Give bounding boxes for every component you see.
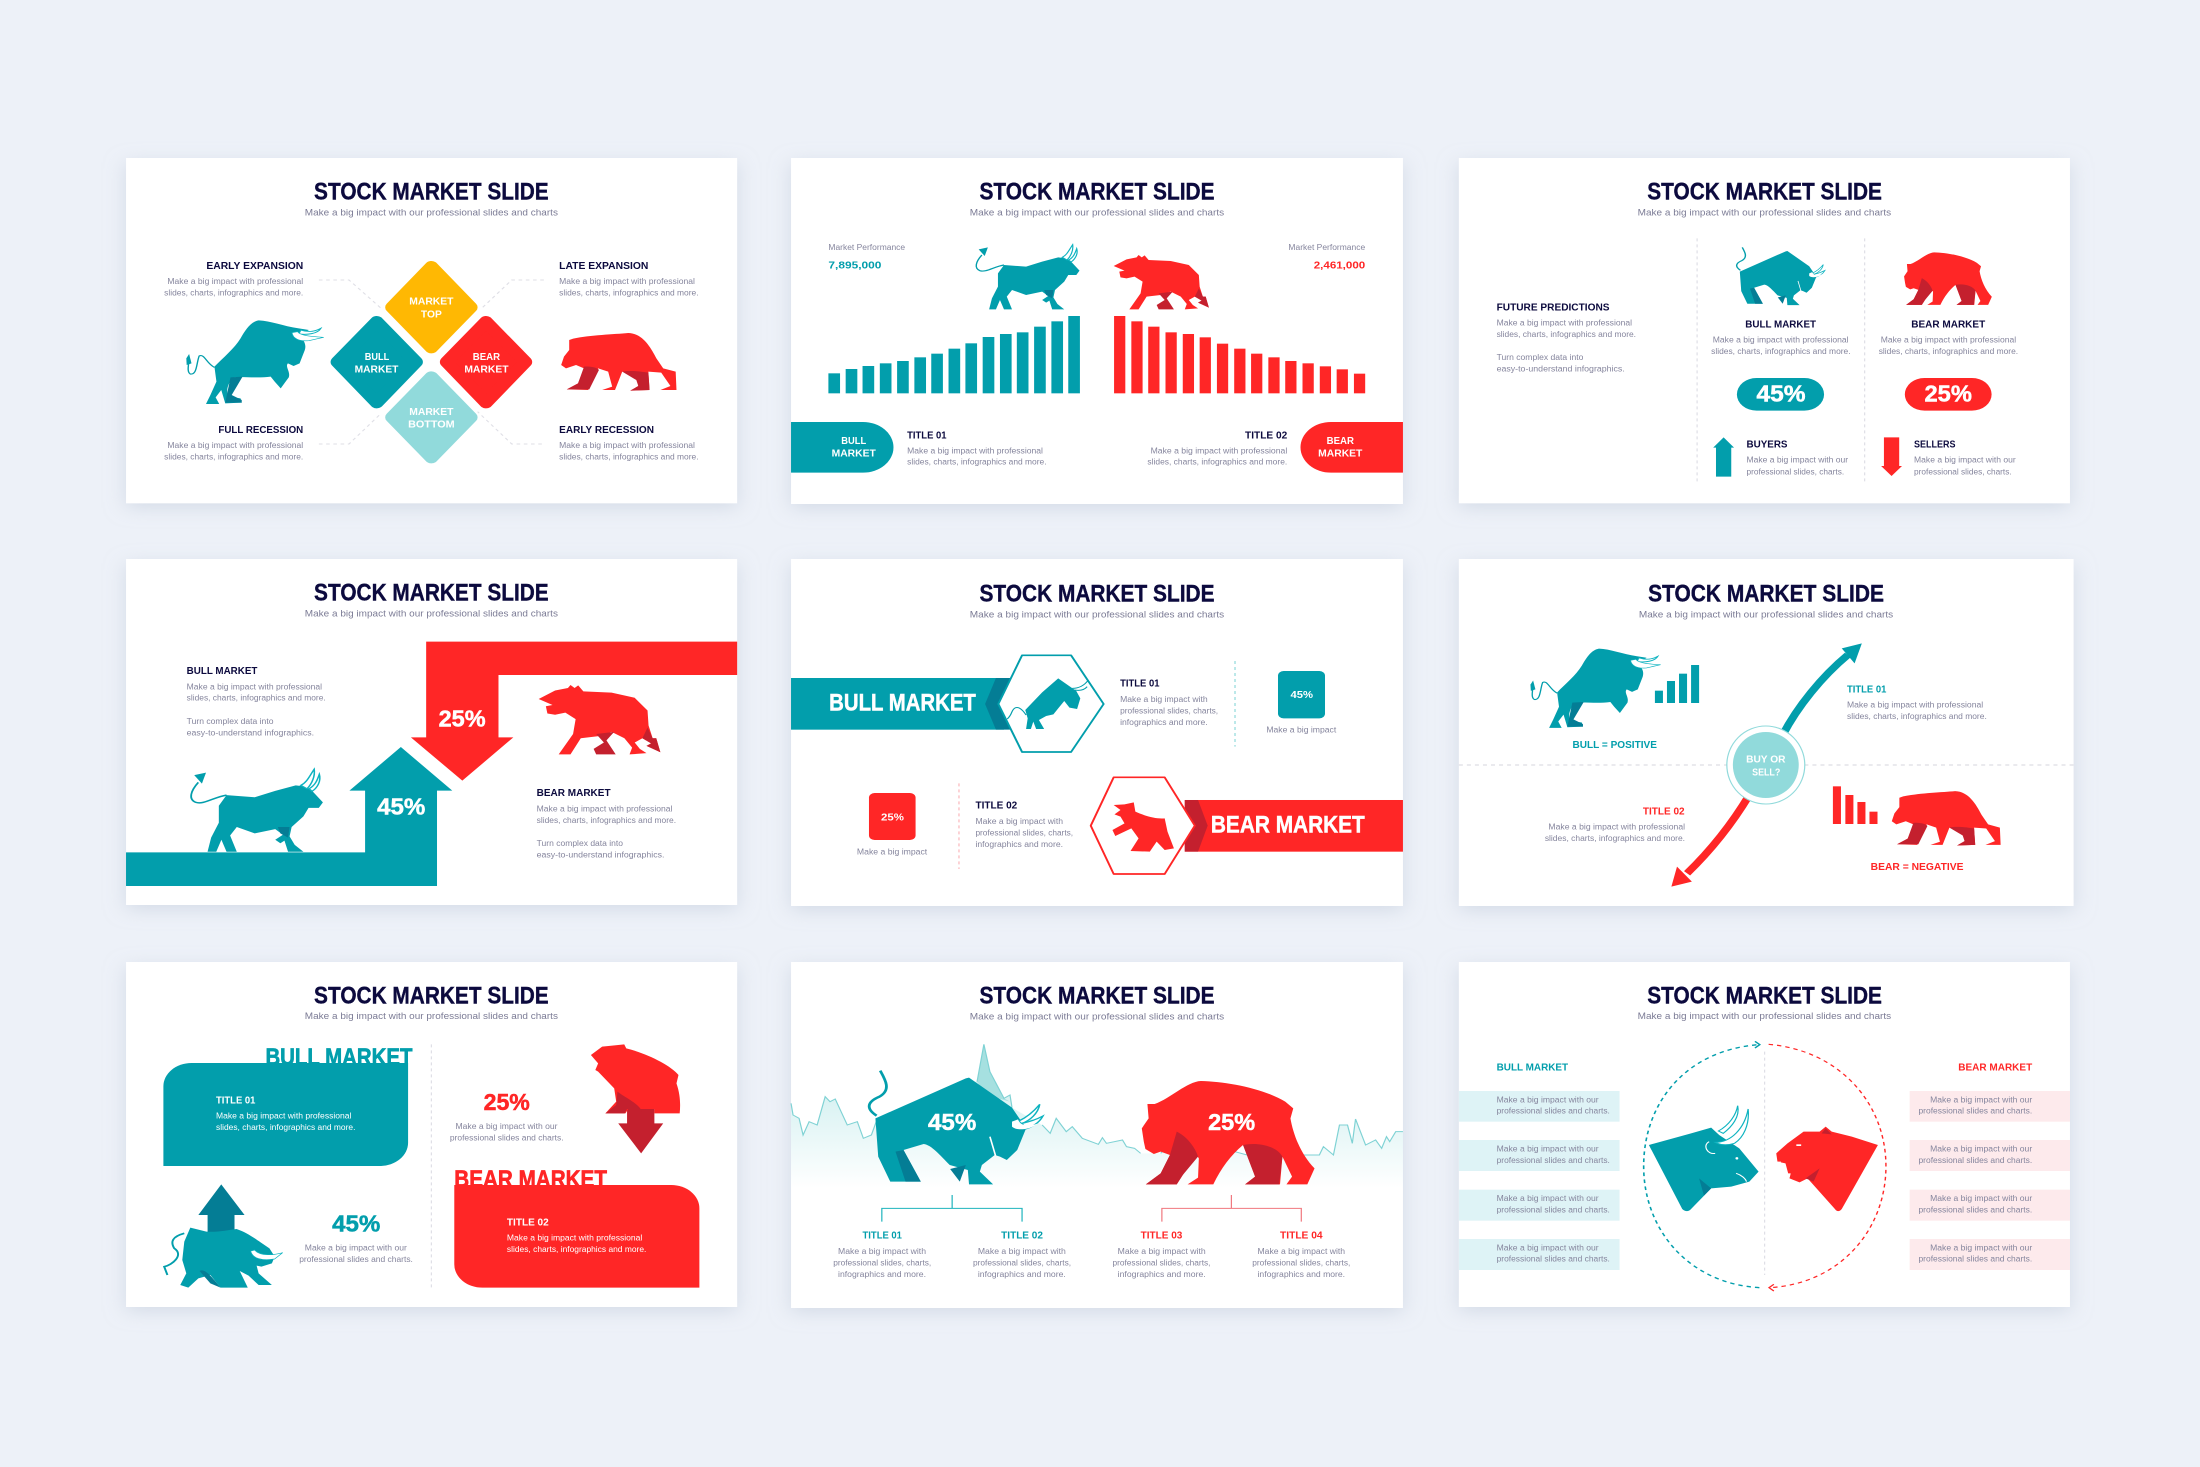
text: title 04: Make a big impact with <box>1258 1247 1345 1256</box>
label: bear negative: BEAR = NEGATIVE <box>1871 862 1964 873</box>
arrow: red down 25% <box>411 642 737 781</box>
panel: market cycle diamonds <box>126 158 737 503</box>
text: title 02: TITLE 02 <box>975 801 1017 811</box>
subtitle: Make a big impact with our professional slides and charts <box>305 208 558 218</box>
text: future predictions: Turn complex data into <box>1497 353 1583 362</box>
stat: 45%: professional slides and charts. <box>299 1255 413 1264</box>
text: title 01: infographics and more. <box>1120 718 1208 727</box>
card: title 01: TITLE 01 <box>216 1095 256 1106</box>
text: title 01 <box>1120 679 1218 727</box>
text: title 03: infographics and more. <box>1118 1270 1206 1279</box>
icon: bear <box>561 333 676 391</box>
text: future predictions: slides, charts, infographics and more. <box>1497 330 1636 339</box>
pill: bear market: MARKET <box>1318 449 1362 459</box>
label: bull positive: BULL = POSITIVE <box>1573 740 1657 751</box>
pill: 25% <box>1905 378 1992 411</box>
text: title 02: TITLE 02 <box>1643 806 1685 817</box>
bar chart: rising <box>1655 665 1699 703</box>
icon: bear 25% <box>1142 1081 1315 1184</box>
icon: bear <box>1904 252 1992 305</box>
text: title 03: professional slides, charts, <box>1112 1258 1210 1267</box>
text: title 02: infographics and more. <box>978 1270 1066 1279</box>
text: title 02: TITLE 02 <box>1245 430 1287 441</box>
stat: 45%: Make a big impact <box>1266 725 1337 734</box>
text: title 04 <box>1252 1230 1350 1279</box>
text: early expansion <box>164 261 303 297</box>
text: full recession <box>164 425 303 461</box>
bar chart: falling <box>1833 786 1878 824</box>
arrow: teal dashed arc <box>1644 1041 1760 1288</box>
hexagon: bear <box>1091 777 1195 874</box>
title: STOCK MARKET SLIDE <box>979 178 1215 205</box>
banner: bull market <box>791 678 1012 730</box>
circle: buy or sell: BUY OR <box>1746 754 1786 765</box>
text: title 01 <box>1847 684 1987 721</box>
stat: 25%: Make a big impact <box>857 847 928 856</box>
arrow: red down 25%: 25% <box>439 707 486 732</box>
arrow: teal up 45% <box>126 747 452 886</box>
diamond: market top <box>392 267 471 348</box>
list: bear items: Make a big impact with our <box>1930 1194 2032 1203</box>
pill: bull market: BULL <box>841 436 866 447</box>
diamond: bear market: BEAR <box>473 352 501 363</box>
text: future predictions: Make a big impact with professional <box>1497 318 1632 327</box>
heading: bear market: BEAR MARKET <box>454 1165 607 1192</box>
panel: hexagon banners <box>791 559 1403 906</box>
text: title 04: infographics and more. <box>1258 1270 1345 1279</box>
panel: market performance bars <box>791 158 1403 504</box>
text: full recession: Make a big impact with professional <box>167 441 303 450</box>
bar chart: bear <box>1114 316 1365 393</box>
arrow: up teal <box>1783 643 1862 735</box>
text: bear market: BEAR MARKET <box>1911 319 1985 330</box>
text: early recession: EARLY RECESSION <box>559 425 654 436</box>
text: early expansion: EARLY EXPANSION <box>206 261 303 272</box>
stat: 25%: 25% <box>881 812 904 823</box>
text: title 02: professional slides, charts, <box>973 1258 1071 1267</box>
text: title 01: Make a big impact with professional <box>1847 700 1983 709</box>
bracket: bull <box>882 1195 1022 1222</box>
diamond: bear market <box>447 322 525 403</box>
text: title 03: Make a big impact with <box>1118 1247 1206 1256</box>
panel: buy or sell <box>1459 559 2074 906</box>
text: title 01: slides, charts, infographics and more. <box>1847 712 1987 721</box>
list: bear items <box>1910 1091 2070 1270</box>
stat: 25% <box>857 793 928 856</box>
text: bull market: BULL MARKET <box>187 666 257 677</box>
text: title 02 <box>1545 806 1685 843</box>
panel: rounded cards <box>126 962 737 1307</box>
diamond: market bottom: BOTTOM <box>408 420 455 430</box>
text: title 02: Make a big impact with professional <box>1151 446 1287 455</box>
list: bull items: professional slides and charts. <box>1497 1254 1610 1263</box>
text: title 02: Make a big impact with professional <box>1548 822 1685 831</box>
text: late expansion: Make a big impact with professional <box>559 277 695 286</box>
list: bull items: Make a big impact with our <box>1497 1243 1599 1252</box>
title: STOCK MARKET SLIDE <box>1648 580 1884 607</box>
stat: 45%: 45% <box>332 1212 380 1237</box>
list: bull items: professional slides and charts. <box>1497 1156 1610 1165</box>
text: title 02: Make a big impact with <box>975 817 1063 826</box>
pill: bear market: BEAR <box>1327 436 1355 447</box>
list: bull items: Make a big impact with our <box>1497 1095 1599 1104</box>
text: late expansion <box>559 261 699 297</box>
stat: bear performance <box>1288 243 1365 271</box>
text: bull market: Make a big impact with professional <box>187 682 322 691</box>
icon: bull head <box>1649 1106 1759 1211</box>
text: title 01 <box>833 1230 931 1279</box>
text: title 02: slides, charts, infographics and more. <box>1147 457 1287 466</box>
text: buyers: professional slides, charts. <box>1747 467 1844 476</box>
text: title 02 <box>973 1230 1071 1279</box>
subtitle: Make a big impact with our professional slides and charts <box>1639 610 1893 620</box>
card: title 01: Make a big impact with professional <box>216 1111 351 1120</box>
stat: bull performance <box>828 243 905 271</box>
text: title 03 <box>1112 1230 1210 1279</box>
stat: bull performance: 7,895,000 <box>828 260 881 271</box>
text: late expansion: slides, charts, infographics and more. <box>559 288 699 297</box>
icon: bull <box>976 245 1080 309</box>
list: bear items: professional slides and charts. <box>1918 1205 2032 1214</box>
icon: bull <box>191 769 323 852</box>
panel: future predictions <box>1459 158 2070 503</box>
text: bear market: slides, charts, infographics and more. <box>1879 347 2018 356</box>
arrow: down <box>1881 437 1902 476</box>
text: bear market: easy-to-understand infographics. <box>537 850 664 859</box>
text: full recession: FULL RECESSION <box>218 425 303 436</box>
text: future predictions: FUTURE PREDICTIONS <box>1497 302 1610 313</box>
panel: arrows up and down <box>126 559 737 905</box>
text: sellers: professional slides, charts. <box>1914 467 2012 476</box>
stat: bear performance: 2,461,000 <box>1314 260 1365 271</box>
diamond: market top: TOP <box>421 309 442 320</box>
text: bear market: Turn complex data into <box>537 839 623 848</box>
text: title 04: TITLE 04 <box>1280 1230 1323 1241</box>
pill: 45% <box>1737 378 1824 411</box>
subtitle: Make a big impact with our professional slides and charts <box>1638 208 1891 218</box>
text: bull market: easy-to-understand infographics. <box>187 728 314 737</box>
heading: bull market: BULL MARKET <box>265 1043 413 1070</box>
hexagon: bull <box>998 655 1104 752</box>
text: buyers: BUYERS <box>1747 439 1788 450</box>
text: late expansion: LATE EXPANSION <box>559 261 648 272</box>
panel: bull vs bear heads <box>1459 962 2070 1307</box>
text: early expansion: Make a big impact with professional <box>167 277 303 286</box>
arrow: up <box>1713 437 1734 477</box>
subtitle: Make a big impact with our professional slides and charts <box>305 609 558 619</box>
card: title 01 <box>163 1063 408 1166</box>
text: future predictions <box>1497 302 1636 373</box>
text: title 01: TITLE 01 <box>863 1230 902 1241</box>
subtitle: Make a big impact with our professional slides and charts <box>970 610 1224 620</box>
icon: bear <box>1892 791 2001 846</box>
stat: 45%: 45% <box>1290 690 1313 701</box>
text: bull market <box>187 666 326 737</box>
subtitle: Make a big impact with our professional slides and charts <box>305 1012 558 1022</box>
list: bear items: professional slides and charts. <box>1918 1106 2032 1115</box>
text: title 01: TITLE 01 <box>1120 679 1160 689</box>
text: title 01: Make a big impact with <box>1120 695 1208 704</box>
text: early recession: slides, charts, infographics and more. <box>559 452 699 461</box>
list: bull items: Make a big impact with our <box>1497 1144 1599 1153</box>
text: bear market <box>537 788 676 859</box>
title: STOCK MARKET SLIDE <box>979 580 1215 607</box>
icon: bull 45% <box>869 1071 1043 1184</box>
text: bear market <box>1879 319 2018 356</box>
diamond: market top: MARKET <box>409 296 453 307</box>
circle: buy or sell <box>1727 726 1805 804</box>
text: future predictions: easy-to-understand infographics. <box>1497 364 1625 373</box>
text: early recession <box>559 425 699 461</box>
text: title 02: professional slides, charts, <box>975 828 1073 837</box>
heading: bear market: BEAR MARKET <box>1958 1063 2032 1073</box>
stat: 25%: professional slides and charts. <box>450 1133 564 1142</box>
text: title 02 <box>975 801 1073 849</box>
banner: bear market: BEAR MARKET <box>1211 811 1365 838</box>
text: sellers: SELLERS <box>1914 439 1956 450</box>
text: buyers <box>1747 439 1848 476</box>
text: bear market: Make a big impact with professional <box>537 804 672 813</box>
card: title 02: Make a big impact with professional <box>507 1233 642 1242</box>
text: sellers: Make a big impact with our <box>1914 455 2016 464</box>
subtitle: Make a big impact with our professional slides and charts <box>1638 1012 1891 1022</box>
card: title 02 <box>454 1185 699 1288</box>
text: title 03: TITLE 03 <box>1141 1230 1182 1241</box>
text: title 01: TITLE 01 <box>907 430 947 441</box>
list: bear items: Make a big impact with our <box>1930 1095 2032 1104</box>
list: bull items: professional slides and charts. <box>1497 1205 1610 1214</box>
text: bull market: slides, charts, infographics and more. <box>1711 347 1851 356</box>
text: bull market: BULL MARKET <box>1745 319 1816 330</box>
text: bear market: slides, charts, infographics and more. <box>537 816 676 825</box>
title: STOCK MARKET SLIDE <box>314 982 549 1009</box>
icon: bull 45%: 45% <box>928 1110 976 1135</box>
stat: 25% <box>450 1090 564 1142</box>
text: title 01: Make a big impact with <box>838 1247 926 1256</box>
pill: bull market <box>791 422 893 473</box>
text: title 01: TITLE 01 <box>1847 684 1887 695</box>
stat: 45%: Make a big impact with our <box>305 1243 407 1252</box>
icon: bull <box>1530 649 1661 728</box>
heading: bull market: BULL MARKET <box>1497 1063 1568 1073</box>
list: bull items: professional slides and charts. <box>1497 1106 1610 1115</box>
text: title 01: slides, charts, infographics and more. <box>907 457 1047 466</box>
title: STOCK MARKET SLIDE <box>314 579 549 606</box>
card: title 02: slides, charts, infographics and more. <box>507 1245 646 1254</box>
list: bear items: professional slides and charts. <box>1918 1254 2032 1263</box>
diamond: market bottom: MARKET <box>409 407 453 418</box>
title: STOCK MARKET SLIDE <box>979 982 1215 1009</box>
icon: bull <box>1737 247 1825 305</box>
list: bear items: Make a big impact with our <box>1930 1144 2032 1153</box>
stat: 25%: Make a big impact with our <box>455 1122 558 1131</box>
text: title 01: professional slides, charts, <box>833 1258 931 1267</box>
text: title 02 <box>1147 430 1287 466</box>
stat: 25%: 25% <box>484 1090 530 1115</box>
subtitle: Make a big impact with our professional slides and charts <box>970 1012 1224 1022</box>
arrow: teal up 45%: 45% <box>377 794 425 820</box>
text: title 02: TITLE 02 <box>1001 1230 1043 1241</box>
icon: bull with up arrow <box>164 1184 283 1288</box>
bracket: bear <box>1162 1195 1301 1222</box>
diamond: bear market: MARKET <box>464 365 509 375</box>
text: bull market <box>1711 319 1851 356</box>
card: title 02: TITLE 02 <box>507 1217 549 1228</box>
icon: bear <box>539 685 660 754</box>
text: title 02: infographics and more. <box>975 840 1063 849</box>
icon: bear head <box>1776 1127 1878 1211</box>
text: title 04: professional slides, charts, <box>1252 1258 1350 1267</box>
circle: buy or sell: SELL? <box>1752 767 1780 778</box>
stat: bear performance: Market Performance <box>1288 243 1365 252</box>
stat: 45% <box>299 1212 413 1264</box>
text: title 01: infographics and more. <box>838 1270 926 1279</box>
panel: bull and bear over stock line <box>791 962 1403 1308</box>
icon: bull <box>186 320 324 404</box>
bar chart: bull <box>828 316 1080 393</box>
title: STOCK MARKET SLIDE <box>1647 982 1882 1009</box>
text: title 02: Make a big impact with <box>978 1247 1066 1256</box>
text: sellers <box>1914 439 2016 476</box>
title: STOCK MARKET SLIDE <box>1647 178 1882 205</box>
text: title 01: professional slides, charts, <box>1120 706 1218 715</box>
stat: bull performance: Market Performance <box>828 243 905 252</box>
list: bull items <box>1459 1091 1620 1270</box>
text: buyers: Make a big impact with our <box>1747 455 1848 464</box>
text: early expansion: slides, charts, infographics and more. <box>164 288 303 297</box>
diamond: bull market <box>337 322 416 403</box>
list: bull items: Make a big impact with our <box>1497 1194 1599 1203</box>
icon: bear <box>1114 255 1209 309</box>
arrow: down red <box>1671 795 1749 887</box>
diamond: bull market: MARKET <box>355 365 398 375</box>
list: bear items: professional slides and charts. <box>1918 1156 2032 1165</box>
connector lines <box>319 280 544 444</box>
list: bear items: Make a big impact with our <box>1930 1243 2032 1252</box>
subtitle: Make a big impact with our professional slides and charts <box>970 208 1224 218</box>
text: bear market: BEAR MARKET <box>537 788 611 799</box>
arrow: red dashed arc <box>1769 1044 1886 1291</box>
text: bull market: slides, charts, infographics and more. <box>187 693 326 702</box>
text: full recession: slides, charts, infographics and more. <box>164 452 303 461</box>
pill: bull market: MARKET <box>832 449 876 459</box>
diamond: bull market: BULL <box>365 352 389 363</box>
text: early recession: Make a big impact with professional <box>559 441 695 450</box>
icon: bear with down arrow <box>591 1044 680 1153</box>
text: bull market: Make a big impact with professional <box>1713 335 1849 344</box>
line chart: stock price <box>791 1044 1403 1188</box>
text: title 02: slides, charts, infographics and more. <box>1545 834 1685 843</box>
text: title 01: Make a big impact with professional <box>907 446 1043 455</box>
icon: bear 25%: 25% <box>1208 1110 1255 1135</box>
pill: 45%: 45% <box>1757 382 1806 407</box>
text: bear market: Make a big impact with professional <box>1881 335 2016 344</box>
title: STOCK MARKET SLIDE <box>314 178 549 205</box>
text: title 01 <box>907 430 1047 466</box>
pill: bear market <box>1300 422 1403 473</box>
text: bull market: Turn complex data into <box>187 717 274 726</box>
stat: 45% <box>1266 671 1337 734</box>
pill: 25%: 25% <box>1925 382 1972 407</box>
diamond: market bottom <box>392 377 471 458</box>
banner: bull market: BULL MARKET <box>829 689 976 716</box>
banner: bear market <box>1185 800 1403 852</box>
card: title 01: slides, charts, infographics and more. <box>216 1123 355 1132</box>
